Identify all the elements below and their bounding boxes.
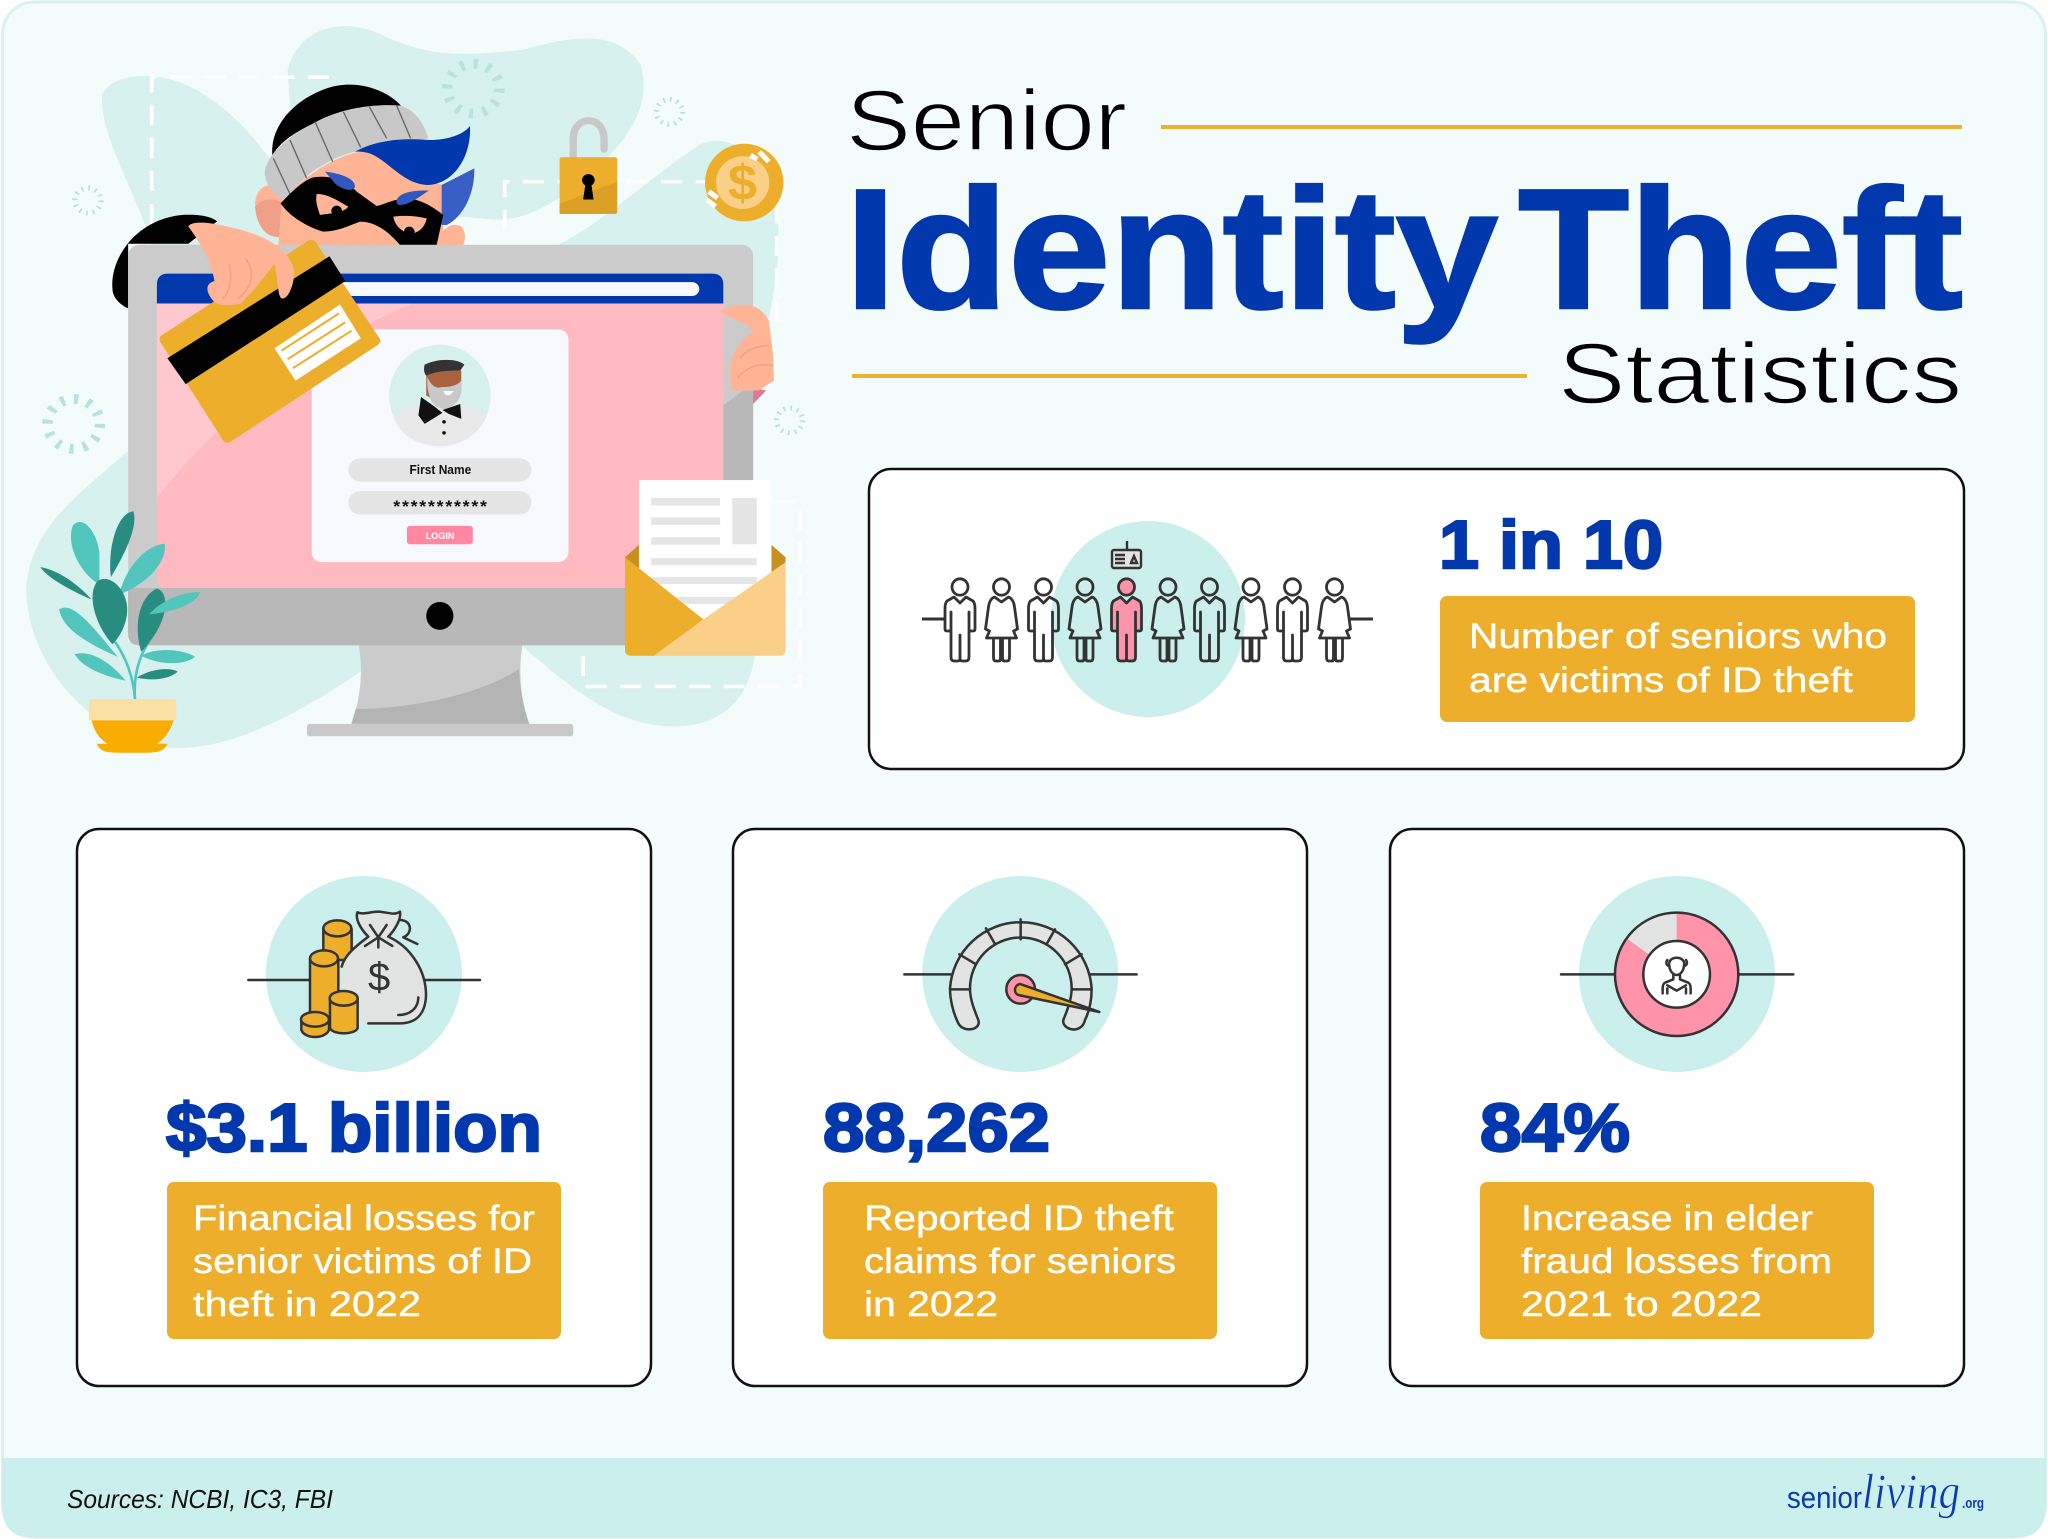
callout: reported claims: in 2022 <box>864 1285 998 1324</box>
credit card and hands <box>165 223 774 438</box>
gold coin icon: $ <box>728 155 757 211</box>
gold coin icon <box>705 144 783 221</box>
login button <box>407 526 473 544</box>
icon: donut chart with senior <box>1561 876 1793 1072</box>
logo: seniorliving.org: .org <box>1962 1495 1984 1512</box>
title line: Senior: Senior <box>846 73 1127 169</box>
envelope icon <box>625 480 786 656</box>
icon: speedometer gauge <box>904 876 1137 1072</box>
callout: elder fraud increase: 2021 to 2022 <box>1521 1285 1762 1324</box>
sources: Sources: NCBI, IC3, FBI <box>67 1484 333 1514</box>
thief head <box>255 85 474 245</box>
title <box>845 73 1963 422</box>
panel: 1 in 10 <box>869 469 1964 769</box>
icon: row of ten people with one victim <box>922 521 1373 717</box>
title line: Theft: Theft <box>1518 154 1963 345</box>
callout: financial losses: Financial losses for <box>193 1199 535 1238</box>
first name field <box>348 458 531 482</box>
callout: financial losses: theft in 2022 <box>193 1285 421 1324</box>
potted plant <box>40 511 200 753</box>
icon: money bag and coins: $ <box>368 956 390 1000</box>
callout: seniors who are victims <box>1440 596 1915 722</box>
callout: financial losses <box>167 1182 561 1339</box>
footer band <box>2 1458 2046 1538</box>
senior avatar <box>389 345 491 446</box>
password field: *********** <box>393 496 487 516</box>
password field <box>348 491 531 516</box>
callout: elder fraud increase <box>1480 1182 1874 1339</box>
stat: 88,262: 88,262 <box>823 1090 1050 1166</box>
panel: reported claims <box>733 829 1307 1386</box>
callout: seniors who are victims: are victims of ID theft <box>1469 661 1853 700</box>
logo: seniorliving.org: living <box>1862 1463 1960 1519</box>
stat: 84%: 84% <box>1480 1090 1630 1166</box>
callout: reported claims <box>823 1182 1217 1339</box>
monitor and login screen <box>112 215 753 736</box>
dashed outlines and sparkles <box>48 64 803 687</box>
background blobs <box>26 26 779 748</box>
callout: seniors who are victims: Number of seniors who <box>1469 617 1887 656</box>
callout: elder fraud increase: Increase in elder <box>1521 1199 1813 1238</box>
callout: reported claims: claims for seniors <box>864 1242 1176 1281</box>
padlock icon <box>560 121 617 214</box>
title line: Statistics: Statistics <box>1558 326 1962 422</box>
panel: financial losses <box>77 829 651 1386</box>
title line: Identity: Identity <box>845 154 1498 345</box>
stat: $3.1 billion: $3.1 billion <box>166 1090 542 1166</box>
callout: elder fraud increase: fraud losses from <box>1521 1242 1832 1281</box>
callout: financial losses: senior victims of ID <box>193 1242 532 1281</box>
callout: reported claims: Reported ID theft <box>864 1199 1174 1238</box>
panel: elder fraud increase <box>1390 829 1964 1386</box>
first name field: First Name <box>410 462 471 477</box>
illustration: thief stealing identity from a computer <box>26 26 803 753</box>
icon: money bag and coins <box>248 876 480 1072</box>
logo: seniorliving.org: senior <box>1787 1480 1862 1515</box>
login button: LOGIN <box>426 531 454 542</box>
logo: seniorliving.org <box>1787 1463 1984 1519</box>
stat: 1 in 10: 1 in 10 <box>1439 507 1663 583</box>
